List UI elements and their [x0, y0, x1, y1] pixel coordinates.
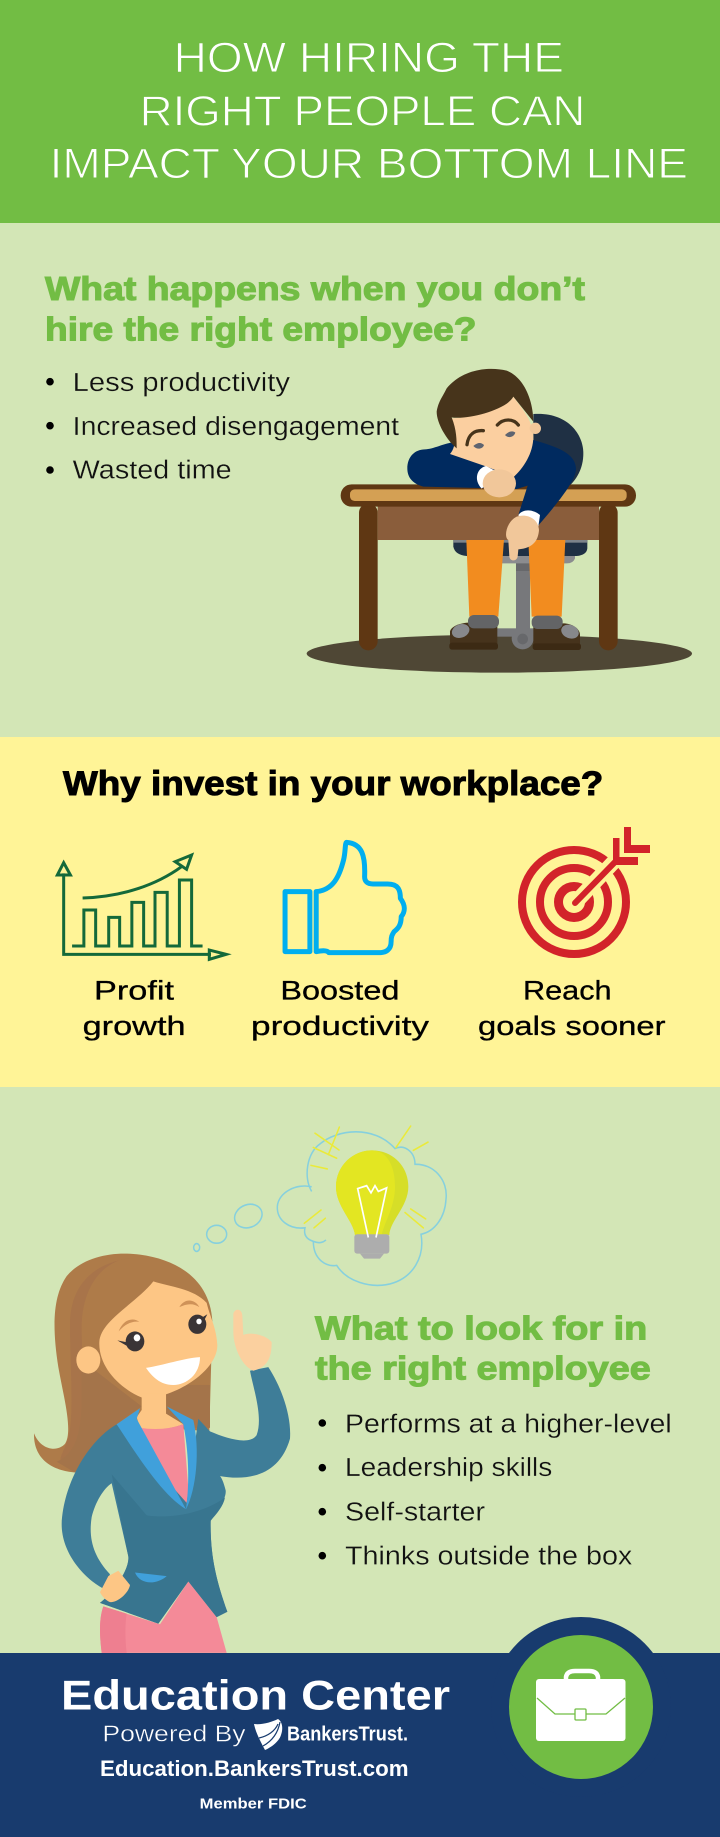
- heading: what happens: hire the right employee?: [45, 312, 476, 349]
- icon: briefcase in green circle: [509, 1635, 653, 1779]
- panel: footer: [0, 1617, 720, 1837]
- panel: why invest in your workplace: [0, 737, 720, 1087]
- icon: thumbs up: [285, 842, 404, 953]
- heading: what happens: What happens when you don’t: [45, 271, 585, 308]
- heading: why invest: Why invest in your workplace?: [63, 765, 603, 803]
- label: boosted productivity: [251, 975, 430, 1041]
- bullet list: employee traits: [318, 1410, 672, 1570]
- illustration: tired man sleeping at desk: [307, 369, 692, 673]
- label: profit growth: growth: [83, 1011, 186, 1041]
- heading: what to look for: the right employee: [315, 1350, 651, 1387]
- text: powered by: Powered By: [102, 1721, 246, 1747]
- bullet list: consequences: [46, 369, 399, 485]
- label: reach goals sooner: [478, 975, 666, 1041]
- bullet list: employee traits: Thinks outside the box: [345, 1542, 633, 1570]
- logo: Bankers Trust: BankersTrust.: [287, 1724, 408, 1746]
- panel: title header: [0, 0, 720, 223]
- label: profit growth: [83, 975, 186, 1041]
- heading: what to look for: What to look for in: [315, 1310, 647, 1347]
- illustration: thought cloud with light bulb: [194, 1126, 446, 1285]
- title: [50, 34, 688, 187]
- bullet list: consequences: Less productivity: [73, 369, 290, 397]
- label: boosted productivity: productivity: [251, 1011, 430, 1041]
- title: RIGHT PEOPLE CAN: [140, 87, 585, 134]
- panel: what happens when you don't hire the right employee: [45, 271, 692, 673]
- bullet list: employee traits: Leadership skills: [345, 1454, 552, 1482]
- text: website: Education.BankersTrust.com: [100, 1756, 409, 1781]
- logo: Bankers Trust: [254, 1719, 408, 1750]
- bullet list: consequences: Wasted time: [73, 457, 232, 485]
- label: reach goals sooner: goals sooner: [478, 1011, 666, 1041]
- panel: what to look for in the right employee: [34, 1126, 672, 1653]
- label: profit growth: Profit: [94, 975, 175, 1005]
- bullet list: employee traits: Performs at a higher-level: [345, 1410, 672, 1438]
- text: education center: Education Center: [61, 1671, 450, 1718]
- icon: target with arrow: [522, 827, 650, 954]
- title: HOW HIRING THE: [174, 34, 564, 81]
- title: IMPACT YOUR BOTTOM LINE: [50, 140, 688, 187]
- illustration: smiling woman pointing up: [34, 1254, 290, 1653]
- icon: profit growth chart: [57, 855, 226, 959]
- heading: what to look for: [315, 1310, 651, 1387]
- text: member FDIC: Member FDIC: [200, 1795, 307, 1812]
- bullet list: employee traits: Self-starter: [345, 1499, 486, 1527]
- heading: what happens: [45, 271, 585, 349]
- label: reach goals sooner: Reach: [523, 975, 612, 1005]
- bullet list: consequences: Increased disengagement: [73, 413, 399, 441]
- label: boosted productivity: Boosted: [280, 975, 399, 1005]
